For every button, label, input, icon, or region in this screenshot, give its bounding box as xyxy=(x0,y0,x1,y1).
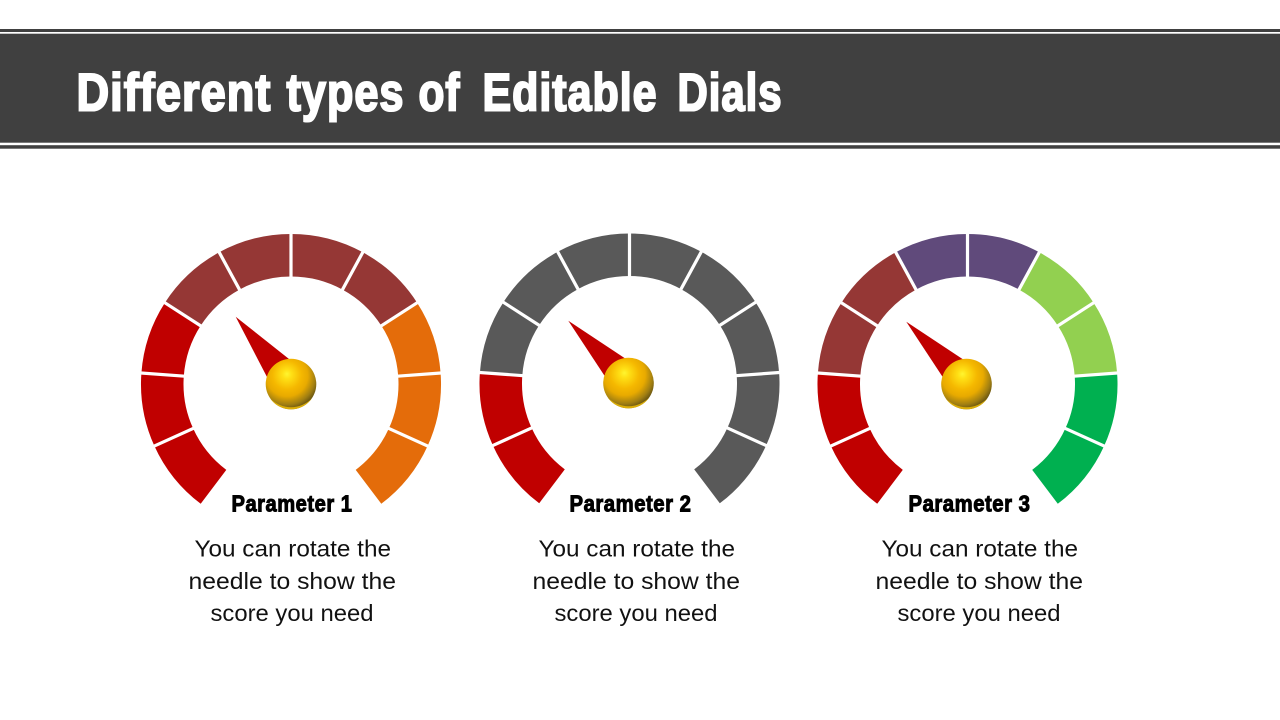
dial 2 band: red xyxy=(479,372,565,503)
dial 3 band: brown xyxy=(818,252,916,376)
dial 1 needle xyxy=(236,317,289,377)
label: Parameter 3: Parameter 3 xyxy=(908,490,1030,516)
dial 2 needle xyxy=(568,321,626,378)
title: Dials xyxy=(678,64,782,123)
dial 1 band: brown xyxy=(165,234,417,326)
title: of xyxy=(418,64,460,123)
dial 2 band: gray xyxy=(480,233,780,503)
description 2: You can rotate the xyxy=(538,536,735,562)
dial 1 xyxy=(139,232,443,504)
dial 1 band: orange xyxy=(356,303,441,504)
dial 3 band: light green xyxy=(1019,252,1117,376)
description 1: You can rotate the xyxy=(194,536,391,562)
description 2: needle to show the xyxy=(532,568,740,594)
title: Editable xyxy=(482,64,658,123)
description 1: score you need xyxy=(210,600,374,626)
dial 3 band: red xyxy=(817,373,903,504)
description 3: score you need xyxy=(898,600,1060,626)
title: types xyxy=(286,64,404,123)
label: Parameter 1: Parameter 1 xyxy=(232,490,352,516)
description 3: needle to show the xyxy=(876,568,1083,594)
label: Parameter 2: Parameter 2 xyxy=(570,490,692,516)
dial 3 hub xyxy=(941,359,992,409)
dial 1 band: red xyxy=(141,303,226,504)
dial 3 band: purple xyxy=(896,234,1039,290)
description 3: You can rotate the xyxy=(882,536,1078,562)
title: Different xyxy=(76,64,272,123)
dial 3 xyxy=(816,232,1119,504)
description 2: score you need xyxy=(554,600,718,626)
dial 2 xyxy=(478,232,781,503)
dial 3 band: green xyxy=(1032,373,1118,504)
dial 1 hub xyxy=(266,359,316,409)
dial 2 hub xyxy=(603,358,654,408)
header band xyxy=(0,29,1280,149)
dial 3 needle xyxy=(906,322,964,379)
description 1: needle to show the xyxy=(188,568,396,594)
